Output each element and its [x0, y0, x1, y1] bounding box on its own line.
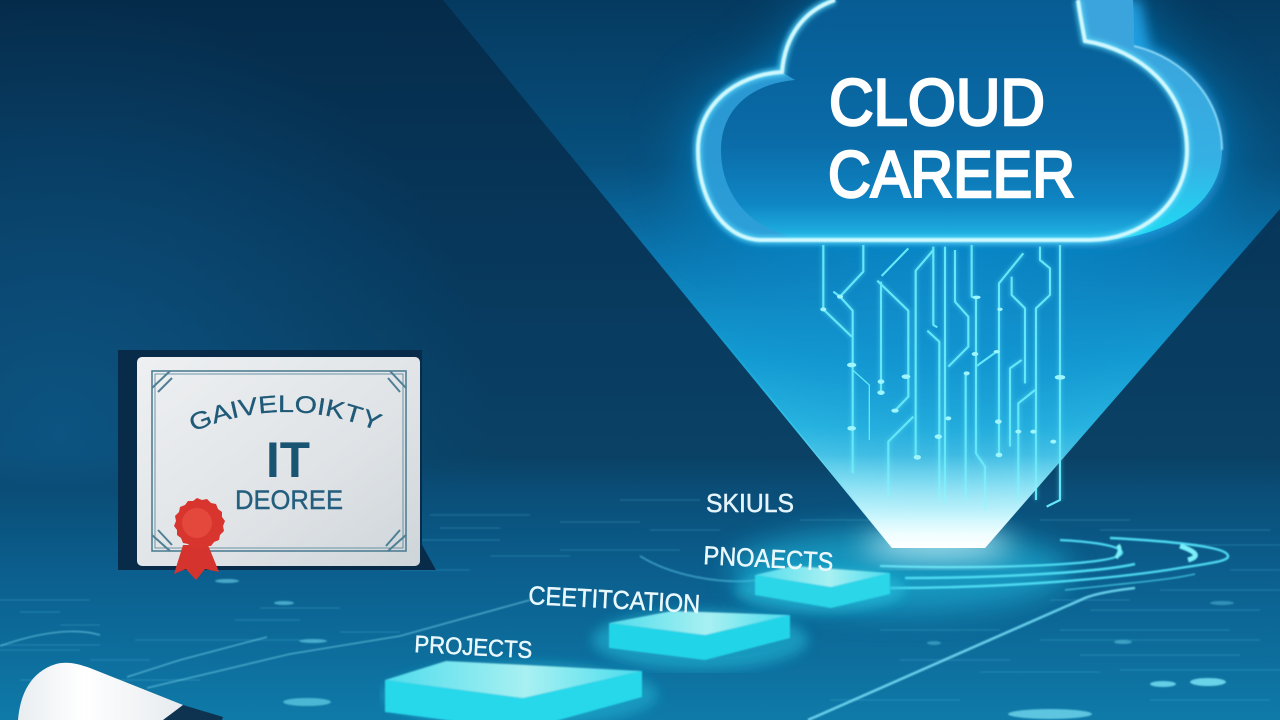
- scroll dark ribbon: [163, 705, 223, 720]
- rolled scroll: [18, 663, 223, 720]
- university text: GAIVELOIKTY: [190, 395, 384, 429]
- label: PNOAECTS: PNOAECTS: [703, 540, 834, 577]
- IT text: IT: [266, 432, 310, 488]
- degree text: DEOREE: [235, 485, 343, 515]
- cloud outline: [698, 0, 1187, 240]
- beam base glow: [818, 455, 1066, 559]
- diploma paper: [137, 357, 420, 566]
- diagonal floor line: [808, 588, 1135, 720]
- beam floor glow: [730, 528, 1070, 612]
- circuit lines: [820, 245, 1065, 510]
- diploma: [118, 350, 436, 580]
- cloud outer glow: [698, 0, 1222, 241]
- step 2: [592, 610, 808, 670]
- cloud outline glow: [698, 0, 1187, 240]
- cloud body: [698, 0, 1187, 240]
- floor rings: [640, 538, 1228, 590]
- cloud wide halo: [690, 0, 1230, 250]
- title: CLOUD: CLOUD: [829, 65, 1045, 139]
- cloud inner left rim: [698, 72, 795, 240]
- diploma border: [152, 371, 406, 551]
- title: CAREER: CAREER: [828, 137, 1075, 211]
- light beam: [443, 0, 1280, 548]
- cloud right thickness: [1078, 0, 1222, 241]
- step 3: [735, 566, 905, 612]
- floor circuit lines: [0, 600, 530, 688]
- circuit glow: [823, 245, 1060, 510]
- cloud: [698, 0, 1222, 241]
- step 1: [382, 661, 658, 720]
- label: SKIULS: SKIULS: [706, 488, 794, 518]
- light spots on floor: [215, 579, 1234, 719]
- icon: red ribbon seal: [174, 498, 225, 580]
- label: CEETITCATION: CEETITCATION: [528, 580, 701, 619]
- label: PROJECTS: PROJECTS: [414, 631, 533, 664]
- diploma backing: [118, 350, 436, 570]
- floor: [0, 455, 1280, 720]
